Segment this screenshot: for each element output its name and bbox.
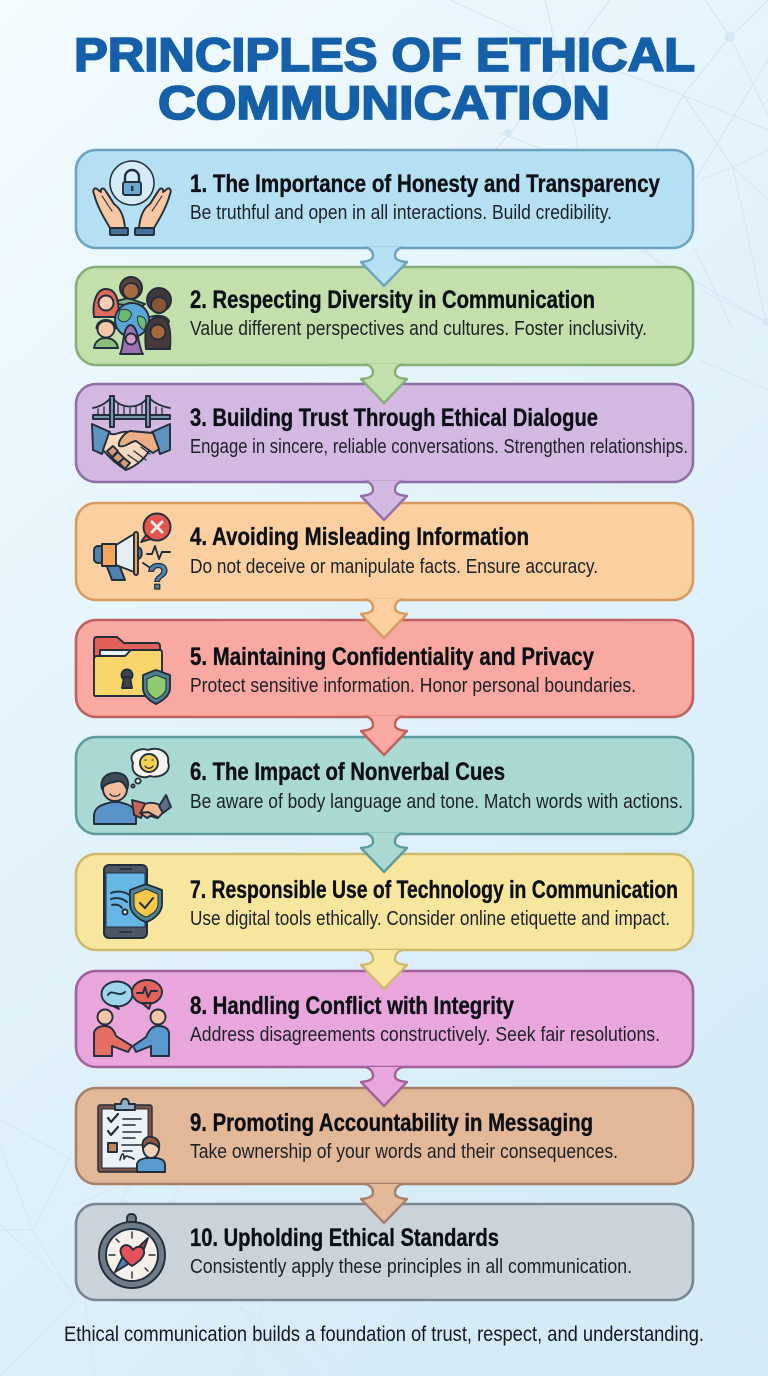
description 1: Be truthful and open in all interactions. Build credibility. bbox=[190, 202, 612, 224]
panel 5: confidentiality and privacy bbox=[76, 620, 693, 717]
heading 3: 3. Building Trust Through Ethical Dialogue bbox=[190, 404, 598, 432]
arrow 2 to 3 bbox=[361, 364, 407, 403]
panel 2: respecting diversity bbox=[76, 267, 693, 365]
arrow 9 to 10 bbox=[361, 1184, 407, 1223]
heading 1: 1. The Importance of Honesty and Transparency bbox=[190, 170, 660, 198]
description 8: Address disagreements constructively. Seek fair resolutions. bbox=[190, 1024, 660, 1046]
icon: megaphone with error bubble bbox=[94, 514, 170, 597]
panel 4: avoiding misleading information bbox=[76, 503, 693, 600]
arrow 3 to 4 bbox=[361, 481, 407, 520]
description 5: Protect sensitive information. Honor personal boundaries. bbox=[190, 675, 636, 697]
title bbox=[74, 28, 695, 129]
card 7 bbox=[76, 854, 693, 950]
panel 7: responsible technology bbox=[76, 854, 693, 950]
panel 1: honesty and transparency bbox=[76, 150, 693, 248]
card 9 bbox=[76, 1088, 693, 1184]
arrow 6 to 7 bbox=[361, 833, 407, 872]
card 10 bbox=[76, 1204, 693, 1300]
description 9: Take ownership of your words and their consequences. bbox=[190, 1141, 618, 1163]
heading 2: 2. Respecting Diversity in Communication bbox=[190, 286, 595, 314]
description 4: Do not deceive or manipulate facts. Ensure accuracy. bbox=[190, 556, 598, 578]
heading 5: 5. Maintaining Confidentiality and Privacy bbox=[190, 643, 594, 671]
panel 9: accountability bbox=[76, 1088, 693, 1184]
arrow 7 to 8 bbox=[361, 950, 407, 989]
icon: person, thought bubble and handshake bbox=[94, 749, 171, 824]
heading 8: 8. Handling Conflict with Integrity bbox=[190, 992, 514, 1020]
arrow 8 to 9 bbox=[361, 1067, 407, 1106]
card 3 bbox=[76, 384, 693, 482]
icon: megaphone with error bubble: ? bbox=[147, 556, 169, 597]
description 7: Use digital tools ethically. Consider online etiquette and impact. bbox=[190, 908, 670, 930]
icon: bridge and handshake bbox=[92, 396, 170, 470]
icon: clipboard checklist with person bbox=[98, 1099, 165, 1172]
description 6: Be aware of body language and tone. Match words with actions. bbox=[190, 791, 683, 813]
card 6 bbox=[76, 737, 693, 834]
description 10: Consistently apply these principles in all communication. bbox=[190, 1256, 632, 1278]
panel 3: building trust bbox=[76, 384, 693, 482]
icon: diverse people around a globe bbox=[94, 277, 171, 354]
arrow 4 to 5 bbox=[361, 599, 407, 638]
title: PRINCIPLES OF ETHICAL bbox=[74, 28, 695, 81]
panel 8: handling conflict bbox=[76, 971, 693, 1067]
heading 6: 6. The Impact of Nonverbal Cues bbox=[190, 758, 505, 786]
arrow 1 to 2 bbox=[361, 247, 407, 286]
card 1 bbox=[76, 150, 693, 248]
title: COMMUNICATION bbox=[158, 76, 610, 129]
icon: compass with heart bbox=[99, 1214, 165, 1288]
description 2: Value different perspectives and cultures. Foster inclusivity. bbox=[190, 318, 647, 340]
panel 6: nonverbal cues bbox=[76, 737, 693, 834]
icon: two people shaking hands with speech bubbles bbox=[94, 980, 169, 1056]
heading 10: 10. Upholding Ethical Standards bbox=[190, 1224, 499, 1252]
card 4 bbox=[76, 503, 693, 600]
card 5 bbox=[76, 620, 693, 717]
card 8 bbox=[76, 971, 693, 1067]
icon: smartphone with wifi and shield bbox=[104, 865, 162, 938]
heading 4: 4. Avoiding Misleading Information bbox=[190, 523, 529, 551]
card 2 bbox=[76, 267, 693, 365]
icon: locked folder with shield bbox=[94, 637, 170, 704]
arrow 5 to 6 bbox=[361, 716, 407, 755]
heading 9: 9. Promoting Accountability in Messaging bbox=[190, 1109, 593, 1137]
panel 10: ethical standards bbox=[76, 1204, 693, 1300]
icon: hands holding a lock bbox=[93, 161, 171, 235]
